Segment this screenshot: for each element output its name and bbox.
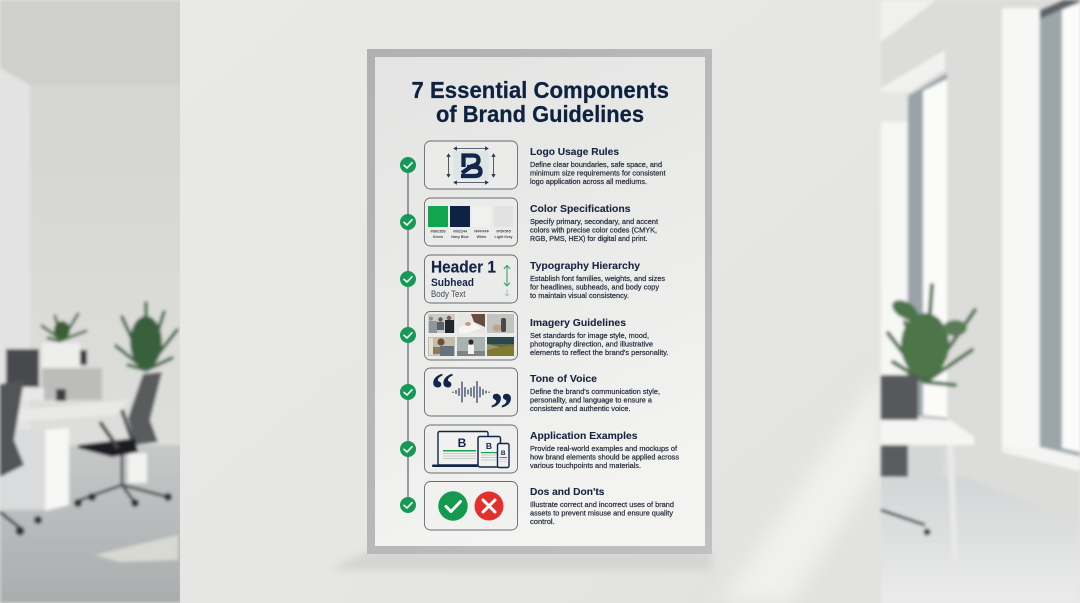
typography text: for headlines, subheads, and body copy <box>530 282 659 292</box>
color swatch card: White <box>477 235 486 239</box>
typography text: Typography Hierarchy <box>530 260 640 272</box>
application text: Application Examples <box>530 430 638 442</box>
typography card: Subhead <box>431 277 474 289</box>
check markers <box>400 157 416 513</box>
tone card <box>424 363 518 434</box>
title: of Brand Guidelines <box>436 101 644 127</box>
photo: landscape <box>487 337 514 356</box>
imagery text: Set standards for image style, mood, <box>530 331 649 340</box>
photo: object <box>487 314 514 333</box>
icon: size arrows <box>504 266 510 296</box>
typography text <box>530 260 665 300</box>
color swatch card: #0BC853 <box>430 230 446 234</box>
application text: various touchpoints and materials. <box>530 461 641 470</box>
photo: man on phone <box>428 337 455 356</box>
application text: Provide real-world examples and mockups of <box>530 444 678 453</box>
color swatch card: #F5F5F5 <box>496 230 511 234</box>
logo text: Logo Usage Rules <box>530 146 619 158</box>
typography card <box>424 255 518 303</box>
tone text: consistent and authentic voice. <box>530 404 630 413</box>
tone text: personality, and language to ensure a <box>530 396 653 404</box>
tone text <box>530 373 660 413</box>
typography card: Header 1 <box>431 259 496 277</box>
component 7: dos and don'ts <box>424 482 674 530</box>
devices card <box>424 425 518 473</box>
icon: sound wave <box>453 382 489 402</box>
photo: woman outdoors <box>457 337 485 356</box>
color swatch card: Navy Blue <box>451 235 469 239</box>
color swatch card: Green <box>433 235 443 239</box>
photo: meeting <box>428 314 455 333</box>
color text <box>530 203 658 243</box>
dos text <box>530 486 674 526</box>
color swatch card: #002244 <box>453 230 467 234</box>
typography text: to maintain visual consistency. <box>530 291 629 300</box>
component 5: tone of voice <box>424 363 660 434</box>
poster frame <box>367 49 712 554</box>
icon: red cross <box>474 492 504 520</box>
poster shadow on wall <box>330 552 712 570</box>
dos text: assets to prevent misuse and ensure quality <box>530 508 673 518</box>
logo card <box>424 141 518 189</box>
icon: laptop: B <box>458 436 467 450</box>
icon: opening quote: “ <box>431 363 454 414</box>
logo text <box>530 146 666 186</box>
icon: B logo <box>461 156 480 176</box>
application text <box>530 430 679 470</box>
typography text: Establish font families, weights, and sizes <box>530 274 665 283</box>
imagery text: Imagery Guidelines <box>530 317 626 329</box>
component 2: color specifications <box>424 198 658 246</box>
timeline connector <box>407 165 409 505</box>
background: sunlight on wall <box>720 370 883 603</box>
logo text: logo application across all mediums. <box>530 177 647 186</box>
dos text: Illustrate correct and incorrect uses of brand <box>530 500 674 509</box>
title <box>412 77 669 127</box>
background: left office scene <box>0 0 182 603</box>
color swatch card: #FFFFFF <box>474 230 490 234</box>
icon: phone: B <box>501 450 506 457</box>
imagery text: elements to reflect the brand's personality. <box>530 348 668 357</box>
poster <box>367 49 712 554</box>
icon: tablet: B <box>486 441 492 451</box>
tone text: Tone of Voice <box>530 373 597 385</box>
dos and don'ts card <box>424 482 518 530</box>
icon: green check <box>438 491 468 521</box>
component 3: typography hierarchy <box>424 255 665 303</box>
background: right office scene <box>881 0 1080 603</box>
color text: Specify primary, secondary, and accent <box>530 217 658 226</box>
color text: colors with precise color codes (CMYK, <box>530 226 657 234</box>
title: 7 Essential Components <box>412 77 669 103</box>
photo grid card <box>424 312 518 360</box>
background: central wall <box>180 0 883 603</box>
component 1: logo usage rules <box>424 141 666 189</box>
poster paper <box>375 57 705 546</box>
logo text: Define clear boundaries, safe space, and <box>530 160 662 169</box>
typography card: Body Text <box>431 289 466 299</box>
color swatch card <box>424 198 518 246</box>
imagery text: photography direction, and illustrative <box>530 340 653 348</box>
component 6: application examples <box>424 425 679 473</box>
tone text: Define the brand's communication style, <box>530 387 660 396</box>
photo: writing <box>457 314 485 333</box>
application text: how brand elements should be applied across <box>530 452 679 462</box>
logo text: minimum size requirements for consistent <box>530 168 666 178</box>
icon: closing quote: ” <box>490 383 513 434</box>
color swatch card: Light Gray <box>495 235 512 239</box>
dos text: control. <box>530 517 555 526</box>
color text: RGB, PMS, HEX) for digital and print. <box>530 234 648 243</box>
component 4: imagery guidelines <box>424 312 668 360</box>
dos text: Dos and Don'ts <box>530 486 605 498</box>
color text: Color Specifications <box>530 203 631 215</box>
imagery text <box>530 317 668 357</box>
